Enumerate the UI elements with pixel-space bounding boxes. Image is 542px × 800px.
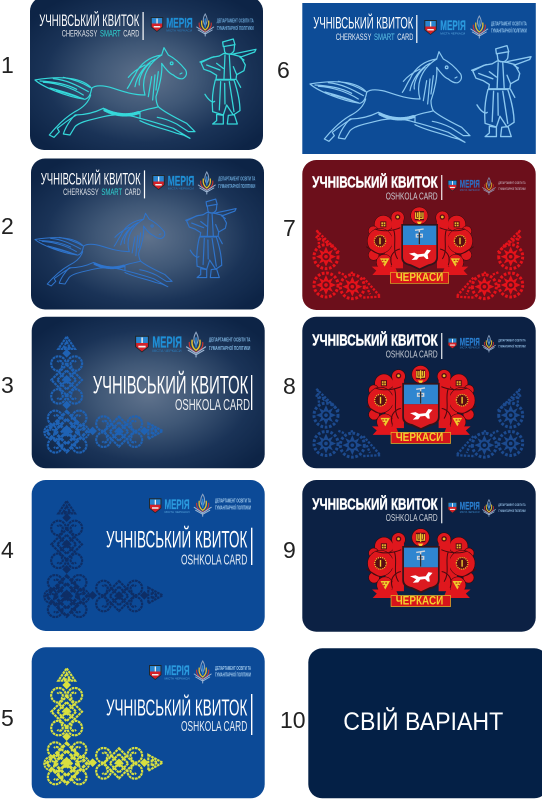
card 1 heading — [39, 11, 144, 40]
embroidery left corner blue — [314, 389, 380, 457]
panel: card 7 maroon coat of arms — [302, 160, 536, 310]
card 6 heading: CHERKASSY — [336, 32, 372, 43]
card 2 logos: МЕРІЯ — [168, 172, 194, 188]
card 8 logos: МІСТА ЧЕРКАСИ — [460, 347, 480, 350]
card 4 logos: ГУМАНІТАРНОЇ ПОЛІТИКИ — [215, 505, 251, 512]
card 1 logos: МІСТА ЧЕРКАСИ — [166, 28, 192, 32]
panel: card 10 own variant — [308, 648, 542, 798]
card 1 heading: УЧНІВСЬКИЙ КВИТОК — [39, 11, 140, 30]
number label 10: 10 — [280, 707, 306, 733]
ornament dark navy — [44, 501, 163, 617]
card 7 logos: МЕРІЯ — [460, 179, 480, 191]
card 1 logos — [151, 14, 254, 36]
card 2 heading: SMART — [101, 187, 122, 198]
card 4 heading — [106, 526, 252, 568]
card 3 logos: ГУМАНІТАРНОЇ ПОЛІТИКИ — [209, 345, 250, 352]
card 9 heading: OSHKOLA CARD — [386, 512, 438, 524]
card 2 heading: CARD — [125, 187, 141, 198]
card 7 heading: УЧНІВСЬКИЙ КВИТОК — [312, 174, 438, 192]
embroidery right corner blue — [456, 389, 523, 457]
card 7 heading: OSHKOLA CARD — [386, 190, 438, 202]
card 3 heading — [93, 369, 252, 414]
number label 5: 5 — [1, 705, 14, 731]
card 2 heading — [41, 169, 145, 198]
card 3 logos — [135, 332, 251, 357]
coat of arms — [366, 207, 474, 284]
card 5 heading — [106, 694, 252, 735]
embroidery left corner red — [314, 230, 380, 299]
panel: card 5 yellow ornament on blue — [32, 647, 265, 798]
card 6 heading: УЧНІВСЬКИЙ КВИТОК — [313, 14, 414, 32]
ornament blue — [44, 337, 163, 453]
number label 2: 2 — [1, 213, 14, 239]
Cherkasy label: ЧЕРКАСИ — [396, 270, 443, 284]
card 9 heading — [312, 495, 442, 524]
card 2 heading: УЧНІВСЬКИЙ КВИТОК — [41, 169, 141, 188]
card 8 heading: OSHKOLA CARD — [386, 348, 438, 360]
card 2 heading: CHERKASSY — [63, 187, 99, 198]
card 8 logos — [448, 335, 526, 352]
card 6 heading — [313, 14, 417, 43]
number label 4: 4 — [1, 537, 14, 563]
card 8 heading: УЧНІВСЬКИЙ КВИТОК — [312, 332, 438, 350]
coat of arms — [367, 366, 476, 444]
card 6 logos: МЕРІЯ — [440, 17, 466, 33]
card 1 heading: CARD — [123, 29, 139, 40]
card 8 logos: МЕРІЯ — [460, 336, 480, 348]
coat of arms — [367, 529, 476, 607]
panel: card 8 navy coat of arms with ornament — [302, 317, 536, 468]
card 3 logos: МЕРІЯ — [152, 334, 182, 351]
number label 9: 9 — [283, 537, 296, 563]
cossack drawing blue — [186, 199, 236, 278]
panel: card 2 blue horse — [31, 158, 264, 310]
card 7 heading — [312, 174, 442, 202]
card 1 logos: МЕРІЯ — [166, 14, 193, 30]
card 6 heading: CARD — [397, 32, 413, 43]
card 4 heading: OSHKOLA CARD — [181, 551, 247, 568]
Cherkasy label: ЧЕРКАСИ — [396, 430, 443, 444]
card 3 logos: МІСТА ЧЕРКАСИ — [152, 349, 182, 353]
card 6 logos: МІСТА ЧЕРКАСИ — [440, 32, 465, 36]
ornament yellow — [44, 668, 163, 784]
card 4 logos: ДЕПАРТАМЕНТ ОСВІТИ ТА — [215, 498, 251, 504]
card 8 heading — [312, 332, 442, 360]
cossack drawing cyan — [200, 39, 256, 124]
panel: card 3 ornament on dark — [32, 317, 265, 468]
horse drawing blue — [35, 213, 172, 287]
card 4 logos: МЕРІЯ — [164, 496, 190, 512]
own variant text: СВІЙ ВАРІАНТ — [343, 706, 503, 736]
card 3 heading: OSHKOLA CARD — [175, 397, 250, 414]
card 4 heading: УЧНІВСЬКИЙ КВИТОК — [106, 526, 248, 554]
number label 6: 6 — [277, 57, 290, 83]
card 2 logos: ДЕПАРТАМЕНТ ОСВІТИ ТА — [218, 176, 255, 182]
card 1 heading: CHERKASSY — [62, 29, 98, 40]
cossack drawing pale blue — [472, 46, 531, 137]
card 1 logos: ДЕПАРТАМЕНТ ОСВІТИ ТА — [217, 18, 254, 24]
card 5 logos: ГУМАНІТАРНОЇ ПОЛІТИКИ — [215, 672, 251, 679]
card 1 heading: SMART — [100, 29, 121, 40]
card 5 heading: OSHKOLA CARD — [181, 719, 247, 735]
card 5 logos: МЕРІЯ — [164, 662, 190, 678]
panel: card 1 cyan horse — [30, 0, 263, 150]
card 6 heading: SMART — [374, 32, 395, 43]
card 9 logos — [448, 500, 526, 516]
number label 7: 7 — [283, 215, 296, 241]
card 3 heading: УЧНІВСЬКИЙ КВИТОК — [93, 369, 249, 399]
card 5 logos: ДЕПАРТАМЕНТ ОСВІТИ ТА — [215, 666, 251, 672]
number label 1: 1 — [1, 52, 14, 78]
card 2 logos: ГУМАНІТАРНОЇ ПОЛІТИКИ — [218, 183, 255, 190]
card 5 logos: МІСТА ЧЕРКАСИ — [164, 676, 190, 680]
card 2 logos — [152, 172, 255, 194]
card 5 logos — [149, 661, 251, 683]
card 3 logos: ДЕПАРТАМЕНТ ОСВІТИ ТА — [209, 338, 251, 344]
card 4 logos — [149, 494, 251, 516]
Cherkasy label: ЧЕРКАСИ — [396, 593, 443, 607]
card 9 logos: МЕРІЯ — [460, 501, 480, 513]
card 7 logos — [448, 178, 526, 194]
panel: card 9 navy coat of arms — [302, 480, 536, 632]
card 2 logos: МІСТА ЧЕРКАСИ — [168, 186, 194, 190]
card 6 logos — [424, 16, 527, 38]
panel: card 4 dark ornament on blue — [32, 480, 265, 631]
card 9 heading: УЧНІВСЬКИЙ КВИТОК — [312, 495, 438, 513]
card 9 logos: МІСТА ЧЕРКАСИ — [460, 511, 480, 514]
card 1 logos: ГУМАНІТАРНОЇ ПОЛІТИКИ — [217, 25, 254, 32]
embroidery right corner red — [456, 230, 523, 299]
horse drawing pale blue — [310, 52, 470, 142]
panel: card 6 square blue horse — [302, 3, 536, 154]
number label 8: 8 — [283, 373, 296, 399]
horse drawing cyan — [35, 48, 195, 138]
card 5 heading: УЧНІВСЬКИЙ КВИТОК — [106, 694, 248, 721]
number label 3: 3 — [1, 372, 14, 398]
card 4 logos: МІСТА ЧЕРКАСИ — [164, 510, 190, 514]
card 7 logos: МІСТА ЧЕРКАСИ — [460, 189, 480, 192]
